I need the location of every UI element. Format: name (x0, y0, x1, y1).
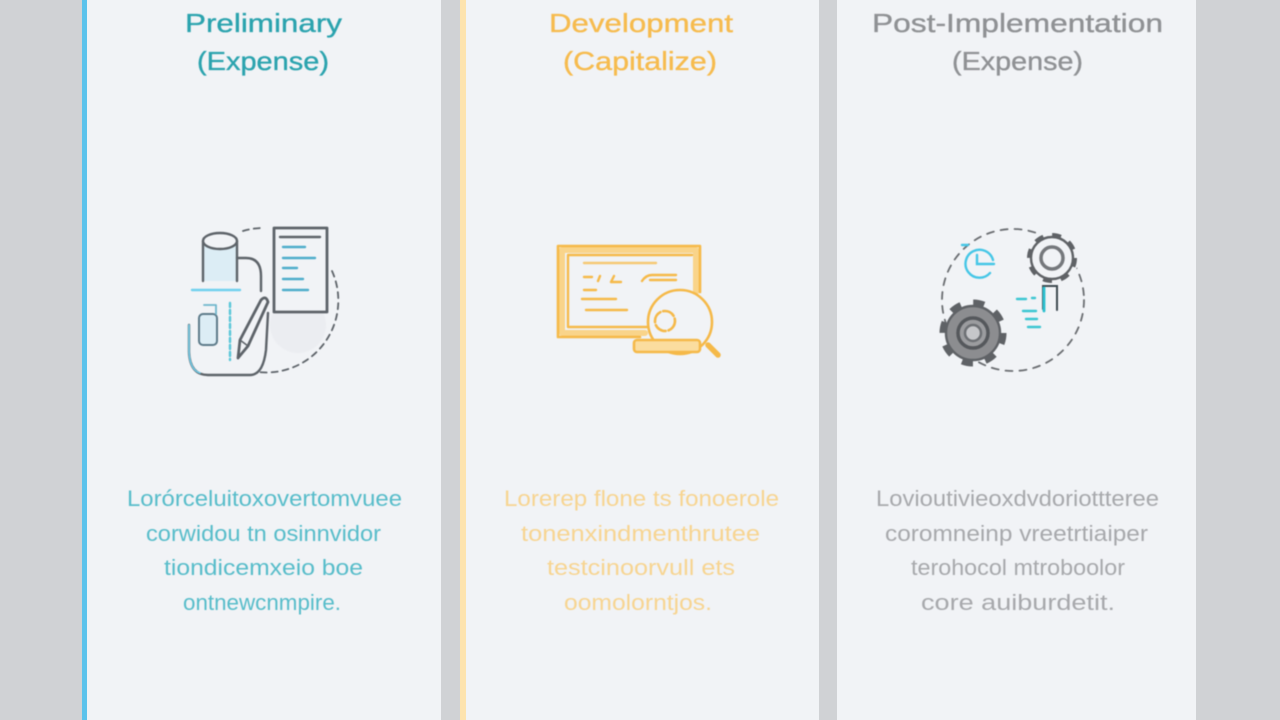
panel: development (460, 0, 819, 720)
body text: preliminary: ontnewcnmpire. (183, 590, 341, 615)
body text: post-implementation: terohocol mtroboolor (911, 555, 1125, 580)
body text: post-implementation (876, 486, 1159, 615)
panel: post-implementation (837, 0, 1196, 720)
heading: preliminary (185, 8, 342, 76)
icon: monitor and magnifier (558, 246, 718, 355)
heading: preliminary: (Expense) (197, 46, 329, 76)
heading: post-implementation: (Expense) (952, 46, 1083, 76)
body text: preliminary (127, 486, 402, 615)
panel: preliminary (82, 0, 441, 720)
body text: preliminary: corwidou tn osinnvidor (146, 521, 381, 546)
heading: post-implementation (872, 8, 1163, 76)
body text: development (504, 486, 779, 615)
body text: post-implementation: core auiburdetit. (921, 590, 1115, 615)
icon: gears and clock (942, 229, 1084, 371)
body text: development: oomolorntjos. (564, 590, 712, 615)
body text: development: tonenxindmenthrutee (521, 521, 760, 546)
heading: development (549, 8, 734, 76)
body text: preliminary: Lorórceluitoxovertomvuee (127, 486, 402, 511)
heading: development: (Capitalize) (563, 46, 717, 76)
heading: post-implementation: Post-Implementation (872, 8, 1163, 38)
body text: development: testcinoorvull ets (547, 555, 735, 580)
heading: preliminary: Preliminary (185, 8, 342, 38)
icon: documents, cylinder and pen (189, 228, 338, 375)
body text: post-implementation: coromneinp vreetrtiaiper (885, 521, 1148, 546)
heading: development: Development (549, 8, 734, 38)
body text: development: Lorerep flone ts fonoerole (504, 486, 779, 511)
body text: post-implementation: Lovioutivieoxdvdoriottteree (876, 486, 1159, 511)
body text: preliminary: tiondicemxeio boe (164, 555, 363, 580)
